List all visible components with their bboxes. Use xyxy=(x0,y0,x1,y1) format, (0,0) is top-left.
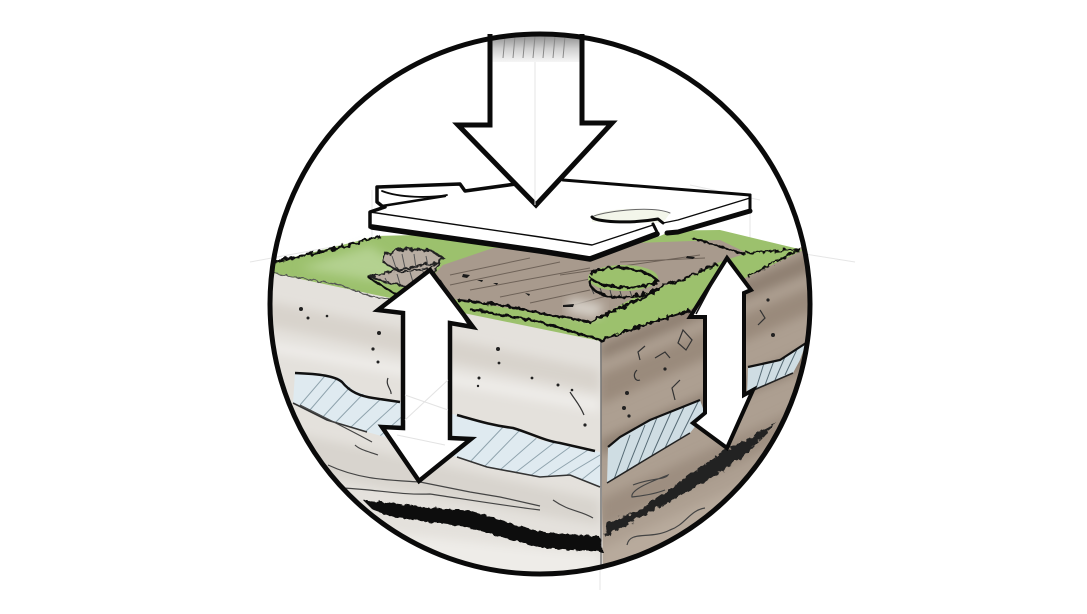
panel: left soil face xyxy=(272,274,602,572)
illustration: soil block in circle xyxy=(250,32,855,590)
arrow shading xyxy=(492,36,580,62)
puzzle outline xyxy=(370,180,750,259)
water layer right xyxy=(607,343,806,485)
faint construction lines xyxy=(250,185,855,590)
grass outline xyxy=(273,236,800,340)
soil specks and pebbles xyxy=(299,298,775,427)
circle border xyxy=(270,34,810,574)
right double arrow xyxy=(690,258,753,448)
water layer left xyxy=(293,370,604,487)
puzzle piece body xyxy=(370,180,750,260)
coal seam left xyxy=(363,500,603,552)
puzzle cut-out xyxy=(592,209,670,223)
grass disc xyxy=(588,265,660,298)
soil block xyxy=(262,230,815,585)
corner edge xyxy=(600,342,602,570)
rock strata lines xyxy=(300,405,705,545)
jigsaw puzzle piece xyxy=(370,180,750,260)
soil edge of left hole xyxy=(372,249,443,286)
arrow outline xyxy=(458,34,612,205)
grass surface xyxy=(270,230,803,341)
coal seam right xyxy=(605,423,777,537)
excavated bare soil xyxy=(425,240,747,322)
left double arrow xyxy=(378,270,473,481)
lit grass highlights xyxy=(306,244,394,284)
big down arrow xyxy=(458,34,612,205)
panel: right soil face xyxy=(600,247,808,564)
